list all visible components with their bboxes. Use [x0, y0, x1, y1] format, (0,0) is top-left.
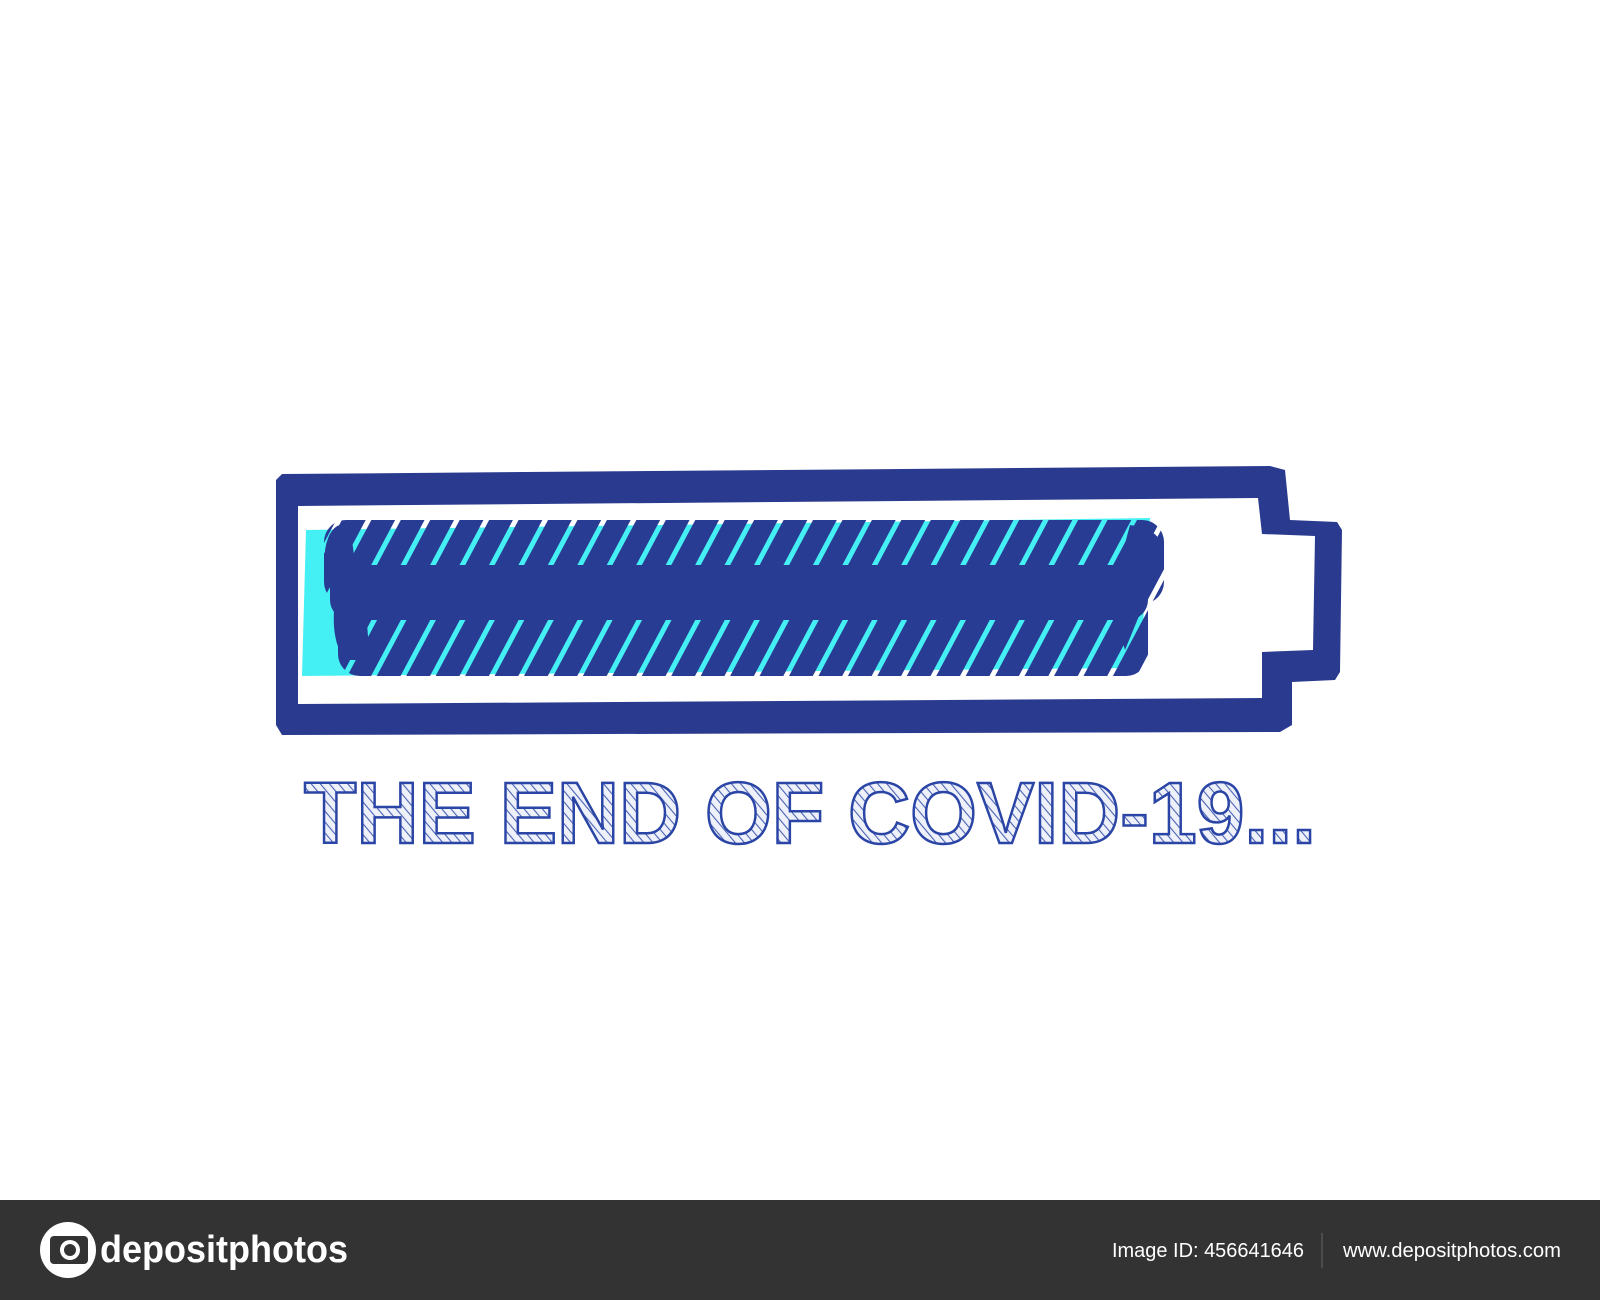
url: www.depositphotos.com	[1342, 1240, 1561, 1262]
battery	[276, 466, 1342, 735]
battery inner	[298, 498, 1315, 704]
brand name: depositphotos	[100, 1229, 348, 1271]
charge scribble	[324, 520, 1164, 676]
title text: THE END OF COVID-19...	[304, 765, 1316, 862]
charge fill cyan	[302, 518, 1150, 676]
battery body outline	[276, 466, 1342, 735]
icon: camera logo	[40, 1222, 96, 1278]
footer bar	[0, 1200, 1600, 1300]
image id: Image ID: 456641646	[1112, 1240, 1304, 1262]
